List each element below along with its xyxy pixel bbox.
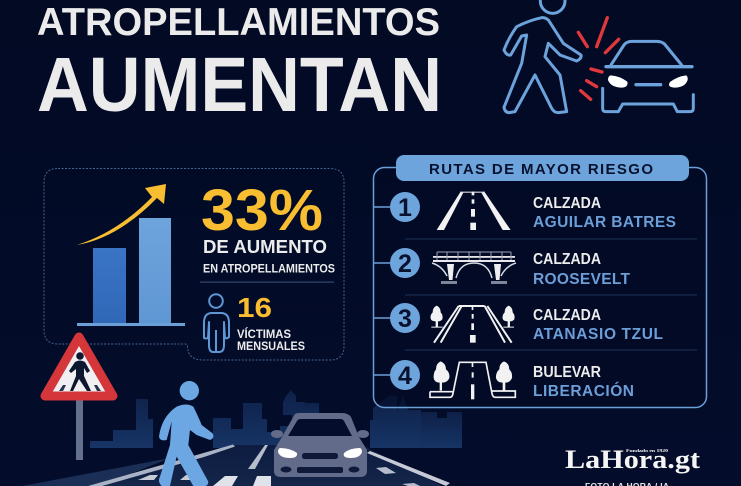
icon: pedestrian struck by car — [504, 0, 693, 113]
badge 2 — [390, 248, 420, 278]
route name: roosevelt: ROOSEVELT — [533, 271, 631, 288]
route name: atanasio tzul: CALZADA — [533, 307, 601, 324]
panel: statistics — [44, 168, 344, 360]
badge 3: 3 — [398, 305, 412, 333]
route name: roosevelt — [533, 251, 631, 288]
stat label: en atropellamientos: EN ATROPELLAMIENTOS — [203, 264, 335, 276]
bar chart with rising arrow — [77, 184, 185, 326]
car front — [271, 413, 369, 477]
route name: roosevelt: CALZADA — [533, 251, 601, 268]
heading: rutas de mayor riesgo — [396, 155, 689, 181]
heading: rutas de mayor riesgo: RUTAS DE MAYOR RIESGO — [429, 161, 653, 178]
route 1 — [390, 192, 676, 231]
title: ATROPELLAMIENTOS — [37, 1, 440, 44]
stat label: de aumento: DE AUMENTO — [203, 236, 327, 257]
icon: road with trees — [431, 306, 515, 343]
road sign: pedestrian crossing — [45, 337, 113, 460]
badge 4: 4 — [398, 362, 412, 390]
road — [22, 444, 450, 486]
route name: liberacion: LIBERACIÓN — [533, 382, 634, 400]
badge 2: 2 — [398, 250, 412, 278]
logo: La Hora: LaHora.gt — [565, 445, 700, 474]
pedestrian silhouette — [159, 381, 213, 486]
icon: bridge — [432, 252, 516, 284]
stat: 16: 16 — [237, 292, 272, 323]
stat label: victimas mensuales: MENSUALES — [237, 341, 305, 353]
icon: straight road — [437, 192, 511, 230]
route name: aguilar batres — [533, 195, 676, 231]
stat label: victimas mensuales: VÍCTIMAS — [237, 328, 291, 341]
route name: liberacion: BULEVAR — [533, 364, 601, 381]
badge 1: 1 — [398, 194, 412, 222]
stat label: victimas mensuales — [237, 328, 305, 353]
route name: atanasio tzul — [533, 307, 663, 343]
route name: aguilar batres: CALZADA — [533, 195, 601, 212]
title — [37, 1, 442, 128]
logo: La Hora: Fundado en 1920 — [626, 448, 669, 453]
title: AUMENTAN — [37, 42, 442, 128]
badge 4 — [390, 360, 420, 390]
badge 1 — [390, 192, 420, 222]
connectors — [373, 207, 392, 375]
route 3 — [390, 303, 663, 343]
route name: liberacion — [533, 364, 634, 400]
icon: person outline — [204, 294, 229, 352]
route 4 — [390, 360, 634, 400]
route name: atanasio tzul: ATANASIO TZUL — [533, 326, 663, 343]
icon: boulevard with trees — [430, 361, 515, 399]
route 2 — [390, 248, 631, 288]
badge 3 — [390, 303, 420, 333]
stat: 33%: 33% — [201, 178, 323, 243]
route name: aguilar batres: AGUILAR BATRES — [533, 214, 676, 231]
panel: high risk routes — [373, 155, 706, 408]
skyline — [90, 390, 462, 448]
